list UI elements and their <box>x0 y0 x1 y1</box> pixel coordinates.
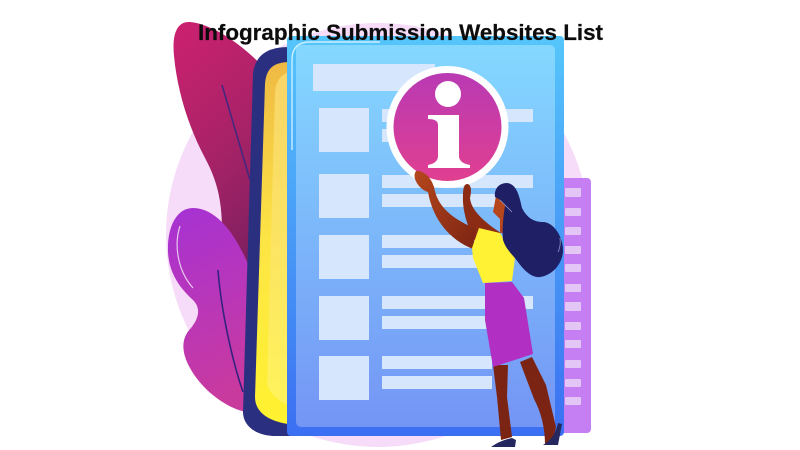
frame highlight line <box>292 42 380 150</box>
front arm <box>415 171 476 249</box>
top <box>472 228 515 283</box>
book cover <box>243 47 300 436</box>
icon: info badge <box>386 66 508 188</box>
tablet screen <box>296 45 555 427</box>
leaf: crimson <box>174 22 262 300</box>
leaf: purple <box>168 208 260 412</box>
back leg <box>520 357 556 444</box>
shoes <box>491 438 516 447</box>
woman holding badge <box>415 171 563 447</box>
hair <box>495 183 563 277</box>
skirt <box>485 282 533 367</box>
list rows <box>313 64 533 400</box>
purple side strip with tabs <box>555 178 591 433</box>
back arm <box>463 184 501 248</box>
background circle <box>166 23 590 447</box>
tablet frame <box>287 36 564 436</box>
front leg <box>493 365 512 440</box>
title: Infographic Submission Websites List <box>198 20 604 45</box>
face and neck <box>493 196 510 238</box>
